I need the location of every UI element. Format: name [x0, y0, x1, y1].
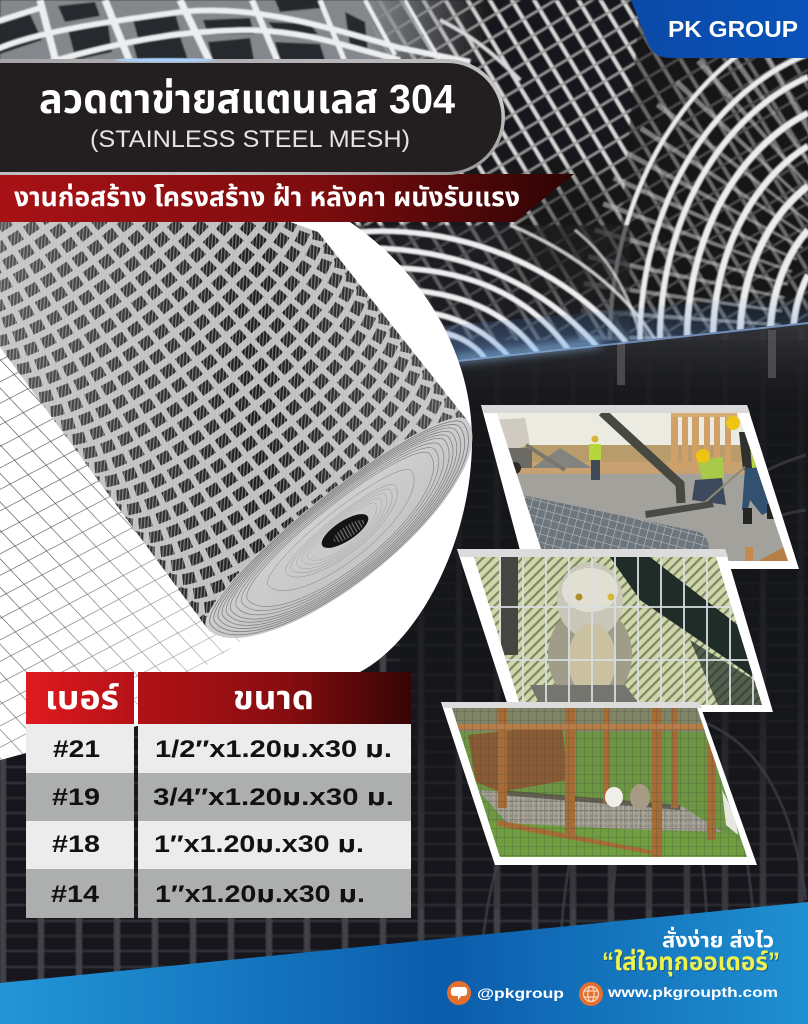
row #19: 3/4″x1.20ม.x30 ม.: [153, 784, 394, 811]
mesh roll: [524, 495, 709, 549]
mesh roll product: [0, 222, 472, 638]
contact: website: www.pkgroupth.com: [607, 984, 778, 1000]
photo: owl behind mesh: [457, 549, 773, 712]
arcs upper middle: [440, 20, 520, 80]
table header: ขนาด: [233, 679, 314, 716]
blue footer band: [0, 902, 808, 1024]
background: lower dark mesh: [0, 320, 808, 1024]
worker far: [589, 444, 601, 460]
row #14: #14: [51, 881, 100, 908]
frame: [671, 413, 731, 471]
brand badge: [631, 0, 808, 58]
row #14: 1″x1.20ม.x30 ม.: [155, 881, 365, 908]
photo: chicken coop: [441, 702, 757, 865]
background: top steel mesh photo: [0, 0, 808, 400]
row #14: [26, 869, 411, 918]
row #18: 1″x1.20ม.x30 ม.: [154, 831, 364, 858]
icon: globe: [579, 982, 603, 1006]
main title: ลวดตาข่ายสแตนเลส 304: [39, 76, 455, 122]
slogan: สั่งง่าย ส่งไว: [662, 927, 774, 952]
row #18: #18: [52, 831, 100, 858]
truck: [490, 418, 530, 450]
white product backdrop: [0, 222, 472, 760]
title pill: [0, 58, 505, 175]
table header: เบอร์: [45, 679, 119, 716]
size table: [26, 672, 411, 918]
contact: line: @pkgroup: [477, 985, 564, 1001]
flat mesh sheet: [0, 340, 250, 760]
top-left blurred grid: [0, 0, 490, 62]
roll body: [0, 222, 470, 632]
fan arcs lower left: [340, 225, 655, 358]
photo: concrete construction: [481, 405, 799, 569]
contact: line: [447, 981, 564, 1005]
row #18: [26, 821, 411, 869]
row #21: #21: [53, 736, 100, 763]
blue light glow: [455, 322, 808, 362]
row #19: [26, 773, 411, 821]
roll end face: [206, 418, 472, 638]
brand badge: PK GROUP: [668, 16, 798, 42]
slogan: “ใส่ใจทุกออเดอร์”: [602, 948, 780, 977]
worker near: [739, 432, 757, 470]
boom: [602, 412, 681, 503]
row #21: [26, 724, 411, 773]
application ribbon: [0, 174, 574, 222]
slogan: “ใส่ใจทุกออเดอร์”: [603, 949, 781, 978]
row #19: #19: [52, 784, 100, 811]
concentric arches: [610, 17, 808, 340]
application ribbon: งานก่อสร้าง โครงสร้าง ฝ้า หลังคา ผนังรับแรง: [14, 182, 520, 212]
table header: [26, 672, 411, 724]
slogan: [602, 927, 781, 978]
worker mid: [697, 457, 724, 482]
subtitle: (STAINLESS STEEL MESH): [90, 126, 410, 153]
row #21: 1/2″x1.20ม.x30 ม.: [155, 736, 392, 763]
contact: website: [579, 982, 778, 1006]
icon: line: [447, 981, 471, 1005]
